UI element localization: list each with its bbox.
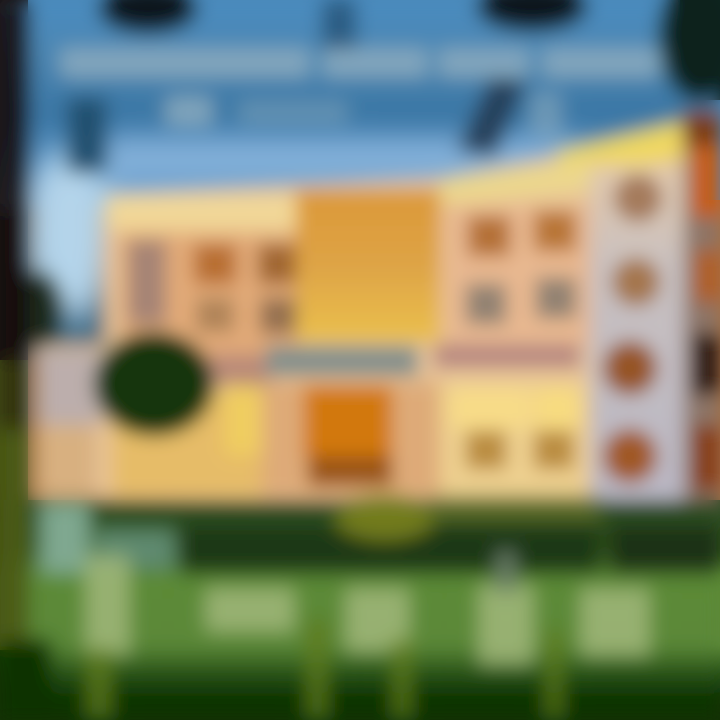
building — [36, 112, 720, 517]
building: lower wall — [112, 355, 586, 500]
building: facade base — [36, 112, 720, 517]
tree in front of the building — [94, 332, 214, 436]
lawn and hedges — [0, 496, 720, 720]
building: windows — [128, 112, 720, 490]
building: entrance — [266, 346, 418, 486]
lawn: blurred pale label blocks — [85, 550, 650, 665]
tree trunk at left edge — [0, 0, 50, 720]
building: balcony band — [434, 344, 580, 368]
building: centre golden wall — [296, 190, 440, 342]
dark foliage at the top — [68, 0, 720, 172]
hedges — [40, 496, 720, 574]
lawn: golden vertical streaks — [86, 620, 563, 720]
title: blurred text band — [60, 48, 660, 136]
sky background — [0, 0, 720, 352]
